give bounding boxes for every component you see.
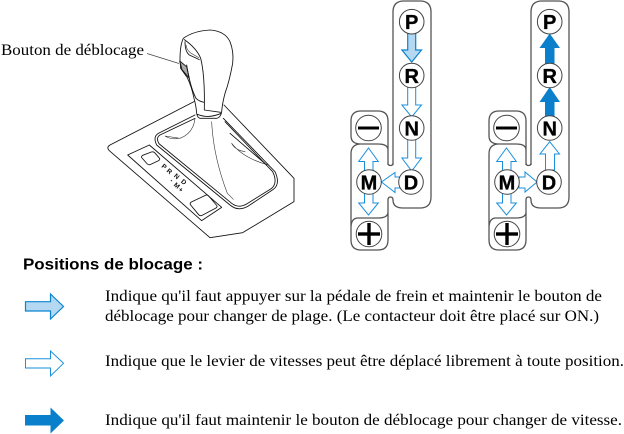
heading: Positions de blocage : — [23, 256, 203, 274]
label: release button: Bouton de déblocage — [1, 42, 144, 59]
console outline — [108, 102, 294, 238]
position N: N — [404, 118, 419, 140]
plate letters: R — [165, 168, 173, 176]
arrow P to R — [402, 32, 422, 62]
selector diagram: brake required — [351, 1, 431, 250]
legend text: free movement: Indique que le levier de vitesses peut être déplacé librement à toute position. — [105, 353, 624, 370]
plate letters: P — [160, 163, 168, 172]
selector plate — [128, 145, 222, 221]
arrow D to N — [540, 142, 560, 170]
legend text: brake and button: déblocage pour changer de plage. (Le contacteur doit être placé sur ON.) — [105, 308, 599, 325]
shift knob — [180, 30, 233, 118]
arrow R to P — [540, 34, 560, 64]
arrow D to M — [382, 172, 400, 192]
position M — [495, 170, 519, 194]
position D: D — [542, 172, 556, 194]
illustration: gear shifter console — [108, 30, 294, 238]
arrow M to D — [519, 172, 537, 192]
plate letters: D — [179, 178, 188, 187]
plate letters: - — [168, 177, 174, 184]
legend arrow: free movement — [26, 351, 64, 376]
plate letters: N — [172, 173, 181, 181]
plate button upper — [141, 152, 160, 165]
position P — [537, 9, 562, 34]
gate outline — [351, 1, 431, 250]
arrow N to D — [402, 139, 422, 171]
selector diagram: button required — [489, 1, 569, 250]
arrow R to N — [402, 86, 422, 117]
position plus — [356, 221, 382, 247]
legend arrow: brake and button — [26, 294, 64, 319]
boot dark crease line — [230, 133, 267, 165]
position P: P — [405, 12, 418, 34]
arrow M up — [497, 148, 516, 172]
release button grey — [180, 61, 189, 78]
position R — [399, 63, 424, 88]
arrow M up — [359, 148, 378, 172]
position M: M — [361, 172, 377, 194]
position D: D — [404, 172, 418, 194]
position minus — [356, 115, 381, 141]
knob inner lines — [184, 40, 221, 112]
position N: N — [542, 118, 557, 140]
plate letters: M — [172, 182, 181, 191]
knob body — [180, 30, 233, 118]
legend text: button only: Indique qu'il faut maintenir le bouton de déblocage pour changer de vitesse. — [105, 412, 622, 429]
position P: P — [543, 12, 556, 34]
position plus — [494, 221, 520, 247]
plate letters: + — [177, 186, 184, 194]
plate letters — [160, 163, 188, 194]
bezel inner — [157, 118, 275, 206]
position M: M — [499, 172, 515, 194]
position D — [399, 170, 423, 194]
legend arrow: button only — [25, 408, 64, 434]
plate button lower — [190, 195, 217, 216]
boot folds — [165, 118, 275, 199]
position P — [399, 9, 424, 34]
arrow M down — [359, 193, 378, 215]
position N — [537, 116, 562, 140]
gate outline — [489, 1, 569, 250]
leader line — [147, 54, 179, 64]
arrow N to R — [540, 87, 560, 118]
position minus — [494, 115, 519, 141]
position M — [357, 170, 381, 194]
position R: R — [404, 66, 419, 88]
position D — [537, 170, 561, 194]
legend text: brake and button — [105, 288, 602, 325]
position R — [537, 63, 562, 88]
position R: R — [542, 66, 557, 88]
knob highlight — [186, 45, 199, 58]
legend text: brake and button: Indique qu'il faut appuyer sur la pédale de frein et maintenir le bouton de — [105, 288, 602, 305]
collar line — [197, 113, 221, 116]
arrow M down — [497, 193, 516, 215]
position N — [399, 116, 424, 140]
bezel outer — [155, 115, 277, 209]
